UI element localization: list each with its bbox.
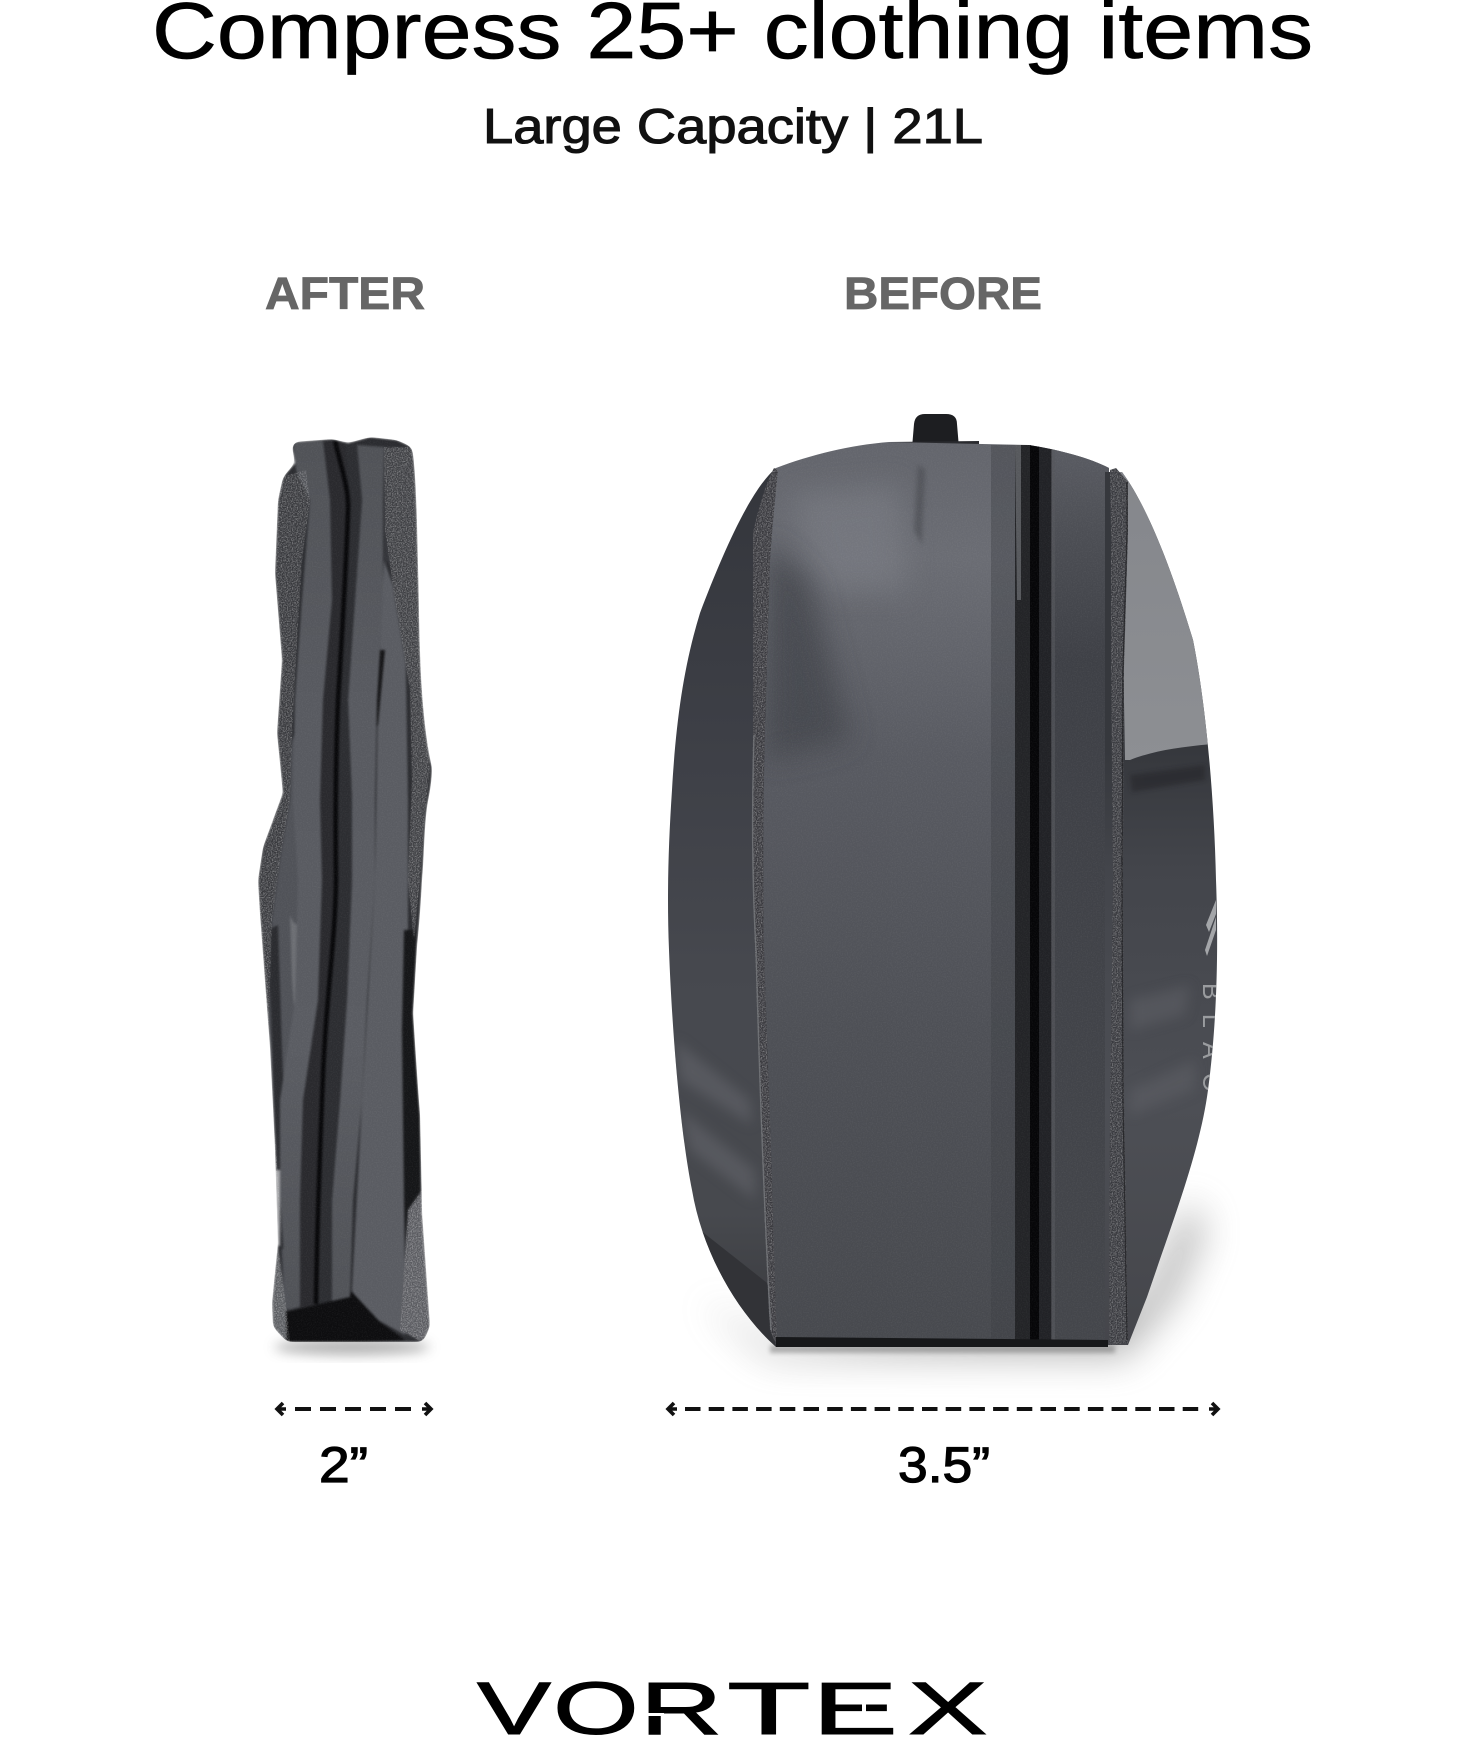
- zipper glare: [1015, 445, 1021, 600]
- logo: VORTEX: X: [908, 1668, 987, 1750]
- fabric grain: after bag: [270, 438, 430, 1342]
- gusset panel: [991, 445, 1015, 1002]
- expanded bag: before: [668, 414, 1225, 1358]
- zipper core: [1030, 445, 1039, 1345]
- left fabric highlight: [290, 918, 298, 1002]
- label: before: BEFORE: [844, 268, 1042, 319]
- compressed bag: after: [250, 430, 440, 1355]
- left side panel: [668, 468, 776, 1347]
- left seam: [258, 474, 310, 1160]
- right fold gap: [376, 648, 386, 726]
- right seam: [384, 447, 430, 940]
- noise texture: centre: [760, 440, 1116, 1345]
- bottom dark: [286, 1292, 405, 1345]
- right seam: [1105, 465, 1133, 1350]
- logo: VORTEX: T: [727, 1667, 811, 1750]
- zipper tape light edge: [1051, 445, 1055, 1345]
- bag body: after: [250, 430, 440, 1350]
- measurement: 2 inches: 2”: [319, 1437, 368, 1493]
- zipper core: [316, 441, 348, 1304]
- logo: VORTEX: R: [640, 1668, 722, 1750]
- handle base patch: [889, 441, 979, 452]
- brand wordmark: BLAC: [1197, 983, 1225, 1091]
- right zipper band: [343, 442, 347, 443]
- floor shadow: before bag: [700, 1200, 1205, 1358]
- measurement: 3.5 inches: 3.5”: [898, 1437, 990, 1493]
- pocket crease: [1130, 765, 1205, 792]
- right tape: [332, 445, 384, 1301]
- top highlight: [804, 492, 896, 584]
- crease: [914, 465, 925, 545]
- right seam dark edge: [1122, 482, 1127, 1340]
- floor contact shadow: [770, 1345, 1115, 1353]
- dark fold by left seam: [269, 925, 284, 1250]
- zipper tape left: [1015, 445, 1031, 1345]
- right panel streaks: [1130, 985, 1195, 1115]
- left panel dark foot: [702, 1232, 774, 1345]
- light grey window: [1120, 470, 1225, 760]
- centre panel: [760, 440, 1116, 1345]
- dimension arrow: before: [668, 1403, 1218, 1415]
- left seam light edge: [753, 735, 771, 1330]
- left fabric: [268, 736, 299, 1308]
- subtitle: Large Capacity | 21L: [483, 100, 983, 154]
- left panel streaks: [675, 1040, 755, 1200]
- zipper tape right: [1038, 445, 1052, 1345]
- right seam lower: [404, 1190, 430, 1342]
- logo: VORTEX: V: [477, 1667, 551, 1750]
- right fabric dark top: [384, 542, 388, 562]
- label: after: AFTER: [265, 268, 425, 319]
- handle tab: [912, 414, 959, 448]
- upper left shadow: [765, 540, 850, 760]
- dimension arrow: after: [277, 1403, 431, 1415]
- left tape: [280, 441, 332, 1310]
- bag bottom edge: [776, 1337, 1108, 1347]
- brand mark: [1205, 900, 1216, 956]
- seam weave: after bag: [255, 435, 435, 1345]
- logo: VORTEX: E: [812, 1668, 898, 1750]
- bag base: [250, 430, 440, 1350]
- right fabric: [352, 560, 408, 1335]
- left zipper band: [310, 1045, 313, 1052]
- right black gap: [402, 930, 420, 1300]
- logo: VORTEX: O: [553, 1667, 639, 1750]
- left seam lower: [272, 1248, 288, 1340]
- left light window: [274, 1170, 280, 1246]
- right side panel: [1105, 470, 1225, 1345]
- floor shadow: after bag: [274, 1339, 430, 1355]
- left seam: [745, 465, 785, 1350]
- right of zipper: [1052, 449, 1109, 1190]
- logo: VORTEX: [477, 1667, 987, 1750]
